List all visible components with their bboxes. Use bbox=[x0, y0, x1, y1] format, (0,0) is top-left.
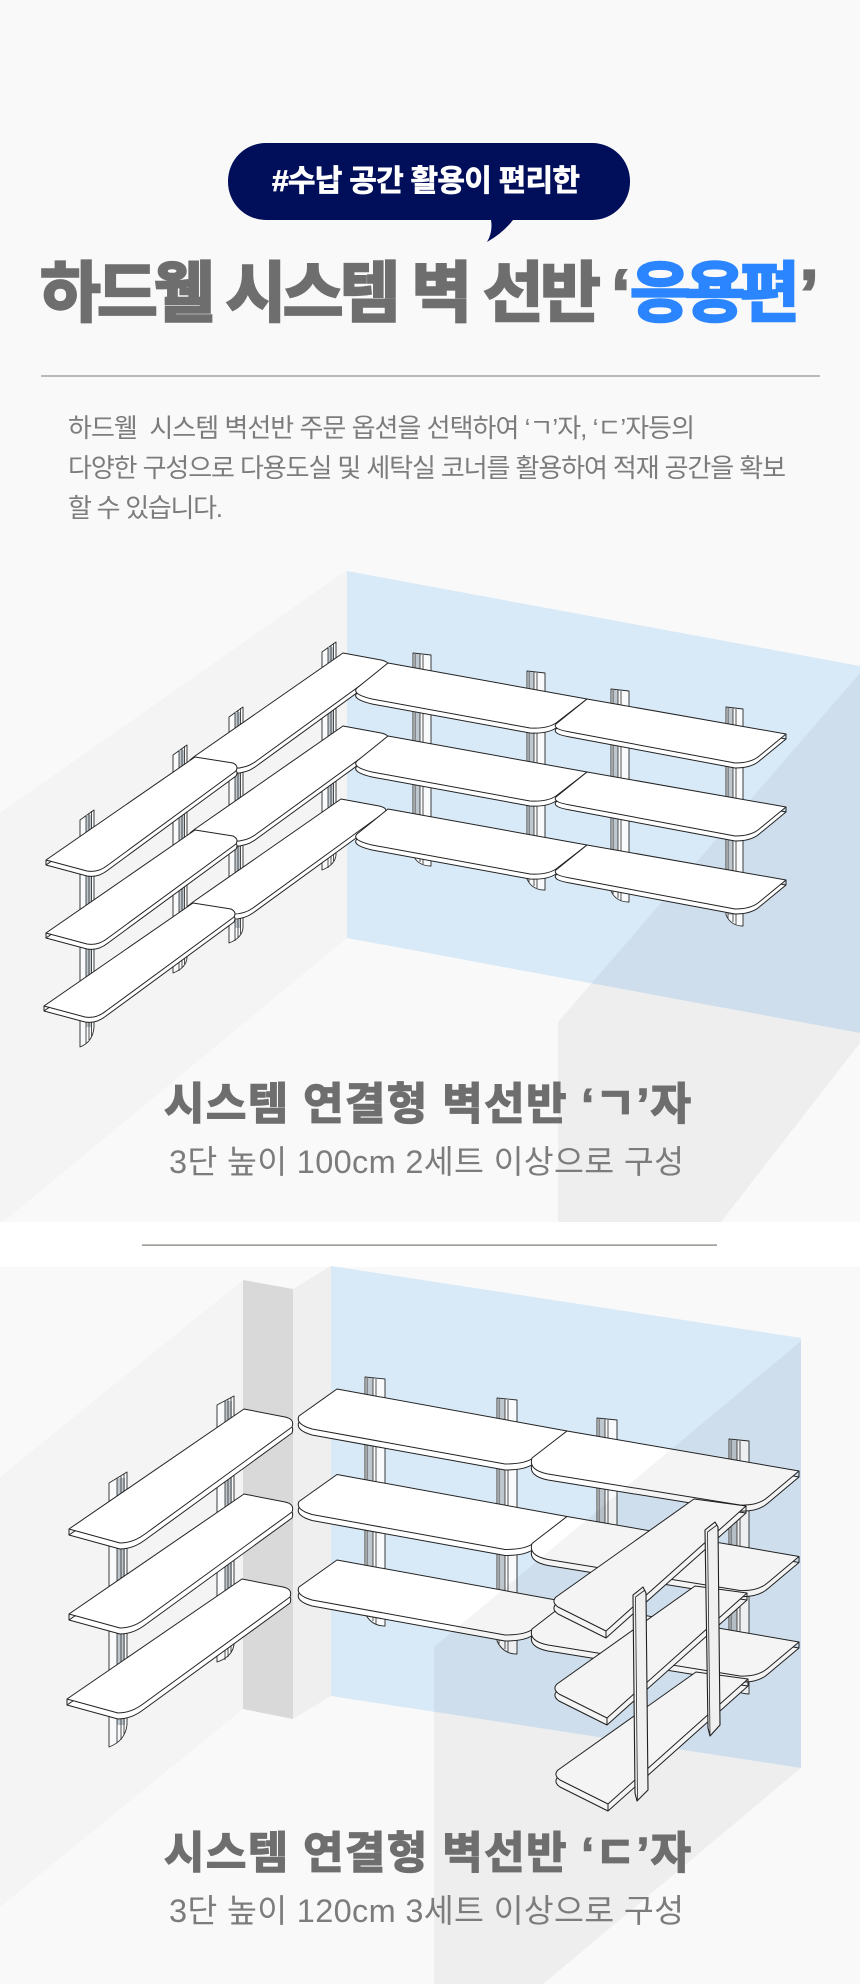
wall rails, left wall bbox=[80, 642, 743, 1047]
subheading: L-type: 3단 높이 100cm 2세트 이상으로 구성 bbox=[169, 1144, 684, 1180]
back wall shelves bbox=[356, 663, 786, 914]
return shelves bbox=[554, 1499, 748, 1811]
heading: U-type: 시스템 연결형 벽선반 ‘ㄷ’자 bbox=[164, 1829, 691, 1878]
section divider bbox=[142, 1244, 717, 1246]
vertical boards bbox=[633, 1522, 720, 1801]
description paragraph bbox=[68, 413, 786, 523]
main title: 하드웰 시스템 벽 선반 ‘ bbox=[40, 256, 630, 330]
description paragraph: 하드웰 시스템 벽선반 주문 옵션을 선택하여 ‘ㄱ’자, ‘ㄷ’자등의 bbox=[68, 413, 695, 443]
shade overlay, U-type room bbox=[434, 1341, 801, 1984]
main title: ’ bbox=[800, 256, 818, 330]
main title: 응용편 bbox=[630, 256, 800, 330]
illustration: L-type shelves bbox=[44, 642, 786, 1047]
description paragraph: 할 수 있습니다. bbox=[68, 493, 223, 523]
white band between sections bbox=[0, 1222, 860, 1267]
illustration: U-type shelves bbox=[67, 1377, 799, 1811]
panel: room background, L-type bbox=[0, 570, 860, 1222]
wall rails bbox=[109, 1377, 749, 1747]
panel: room background, U-type bbox=[0, 1266, 860, 1984]
heading: L-type: 시스템 연결형 벽선반 ‘ㄱ’자 bbox=[164, 1080, 691, 1129]
speech bubble badge bbox=[228, 143, 630, 242]
description paragraph: 다양한 구성으로 다용도실 및 세탁실 코너를 활용하여 적재 공간을 확보 bbox=[68, 453, 786, 483]
left wall shelves bbox=[44, 653, 388, 1022]
left wall shelves bbox=[67, 1409, 293, 1719]
subheading: U-type: 3단 높이 120cm 3세트 이상으로 구성 bbox=[169, 1893, 684, 1929]
speech bubble badge: #수납 공간 활용이 편리한 bbox=[272, 165, 580, 198]
title divider bbox=[41, 376, 820, 377]
back wall shelves bbox=[298, 1389, 799, 1682]
